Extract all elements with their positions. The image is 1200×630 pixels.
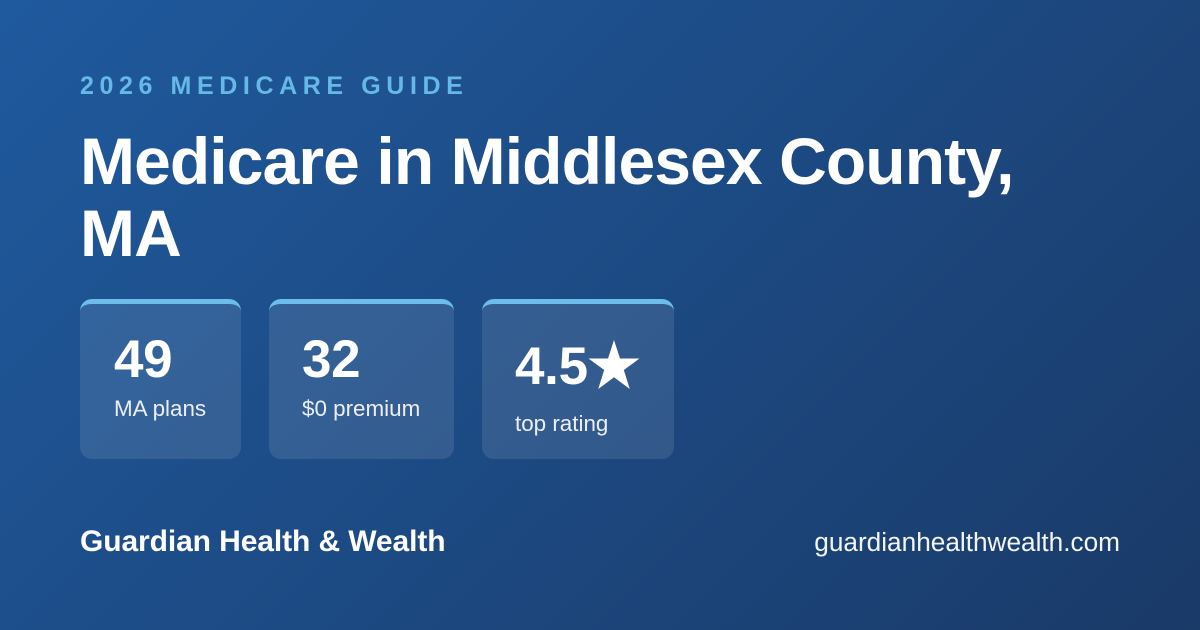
- stat label: MA plans: MA plans: [114, 396, 206, 421]
- stat label: top rating: top rating: [515, 411, 608, 436]
- stat label: $0 premium: $0 premium: [302, 396, 420, 421]
- title: [80, 124, 1014, 270]
- stat number: 32: 32: [302, 330, 360, 389]
- stat card: top rating: [482, 299, 674, 459]
- stat card: $0 premium: [269, 299, 454, 459]
- stat number: 4.5 star: 4.5: [515, 337, 588, 396]
- eyebrow label: 2026 MEDICARE GUIDE: [80, 72, 468, 100]
- stat number: 49: 49: [114, 330, 172, 389]
- brand name: Guardian Health & Wealth: [80, 525, 445, 558]
- title: Medicare in Middlesex County,: [80, 124, 1014, 198]
- title: MA: [80, 196, 181, 270]
- stat card: MA plans: [80, 299, 241, 459]
- website url: guardianhealthwealth.com: [814, 527, 1120, 557]
- stat number: 4.5 star: [515, 337, 640, 396]
